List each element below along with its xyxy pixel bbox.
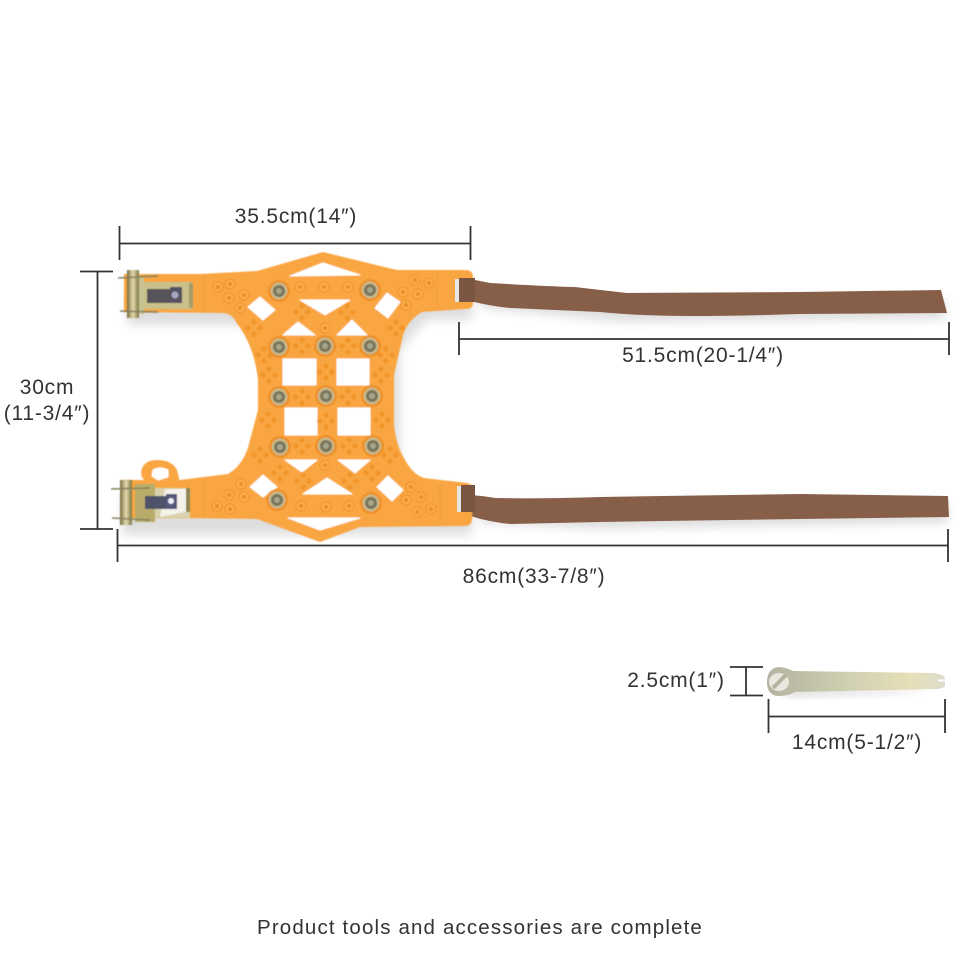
dimension: wrench width <box>730 667 763 696</box>
label: plate height: (11-3/4″) <box>4 402 90 425</box>
dimension: overall length <box>117 529 948 562</box>
brown strap: lower <box>470 494 949 524</box>
moulded ridge lines <box>204 270 440 526</box>
caption: Product tools and accessories are complete <box>257 916 703 939</box>
label: plate height: 30cm <box>20 376 74 399</box>
label: overall length: 86cm(33-7/8″) <box>463 565 605 588</box>
orange traction plate <box>122 252 473 542</box>
ratchet buckle: upper <box>118 270 193 318</box>
ratchet buckle: lower <box>111 480 190 525</box>
buckle lug <box>141 460 180 484</box>
ring studs <box>212 275 436 517</box>
label: wrench length: 14cm(5-1/2″) <box>792 731 922 754</box>
diamond tread studs <box>244 302 406 491</box>
dimension: plate height <box>80 271 113 529</box>
plate body <box>122 252 473 542</box>
brown strap: upper <box>470 279 947 316</box>
label: plate width: 35.5cm(14″) <box>235 205 357 228</box>
label: wrench width: 2.5cm(1″) <box>627 669 725 692</box>
dimension: plate width <box>120 226 470 260</box>
label: plate height <box>4 376 90 425</box>
dimension: wrench length <box>768 699 945 733</box>
strap loops: upper and lower <box>455 278 475 512</box>
icon: wrench tool <box>767 667 946 698</box>
plate cut-outs <box>152 263 403 530</box>
dimension: strap length <box>459 322 949 355</box>
steel bolts <box>266 279 384 514</box>
product shadow <box>122 285 948 535</box>
label: strap length: 51.5cm(20-1/4″) <box>622 344 784 367</box>
